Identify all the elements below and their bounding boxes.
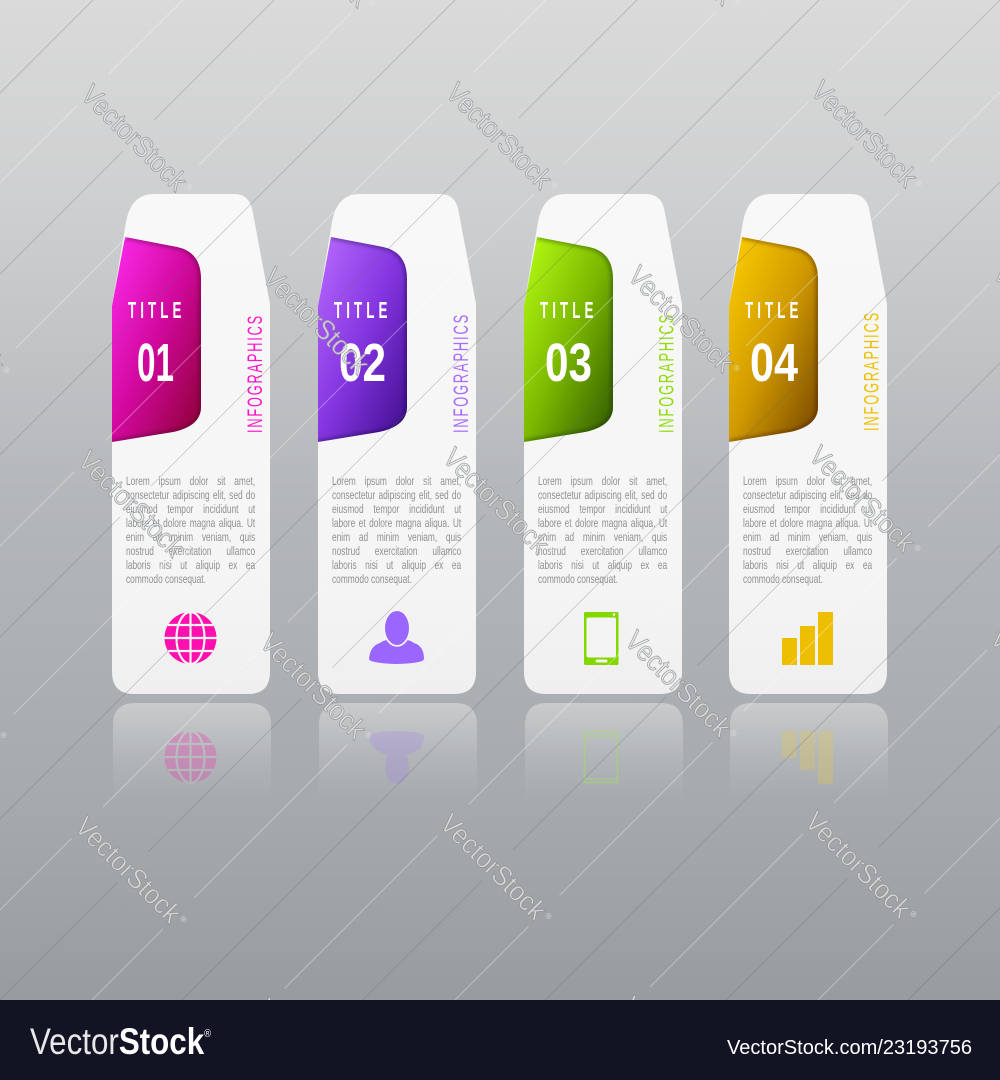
diagonal lines and watermarks overlay: VectorStock [803,440,922,558]
diagonal lines and watermarks overlay: ® [184,182,195,193]
card shape [318,194,476,694]
body text: Lorem ipsum dolor sit amet, [126,474,255,488]
vertical label: INFOGRAPHICS [860,311,884,431]
card shape [112,194,270,694]
diagonal lines and watermarks overlay: ® [1,365,12,376]
body text: laboris nisi ut aliquip ex ea [538,558,667,572]
body text: laboris nisi ut aliquip ex ea [332,558,461,572]
diagonal lines and watermarks overlay: VectorStock [434,808,553,926]
diagonal lines and watermarks overlay: VectorStock [619,625,738,743]
body text: labore et dolore magna aliqua. Ut [538,516,667,530]
reflection 4: bar chart [730,703,888,784]
body text: laboris nisi ut aliquip ex ea [743,558,872,572]
body text: Lorem ipsum dolor sit amet, [332,474,461,488]
coloured tab [524,237,612,442]
body text: nostrud exercitation ullamco [126,544,255,558]
diagonal lines and watermarks overlay: VectorStock [72,445,191,563]
diagonal lines and watermarks overlay: ® [543,911,554,922]
footer logo: ® [204,1028,211,1040]
body text: nostrud exercitation ullamco [332,544,461,558]
tab title: TITLE [540,297,597,323]
body text: commodo consequat. [126,572,206,586]
body text: eiusmod tempor incididunt ut [538,502,667,516]
body text: consectetur adipiscing elit, sed do [538,488,667,502]
body text: eiusmod tempor incididunt ut [332,502,461,516]
tab title: TITLE [128,297,186,323]
tab number: 04 [750,333,798,393]
body text: eiusmod tempor incididunt ut [126,502,255,516]
panel 1: pink card [112,194,270,694]
footer image id: VectorStock.com/23193756 [727,1037,972,1059]
coloured tab [112,237,201,442]
body text: enim ad minim veniam, quis [332,530,461,544]
body text: commodo consequat. [743,572,823,586]
diagonal lines and watermarks overlay: VectorStock [799,806,918,924]
diagonal lines and watermarks overlay: ® [549,180,560,191]
diagonal lines and watermarks overlay: ® [366,365,377,376]
reflection 2: person [319,703,477,784]
coloured tab [729,237,818,442]
diagonal lines and watermarks overlay: ® [728,728,739,739]
body text: enim ad minim veniam, quis [743,530,872,544]
tab number: 02 [339,333,386,393]
diagonal lines and watermarks overlay: ® [908,909,919,920]
diagonal lines and watermarks overlay: ® [546,545,557,556]
card shape [729,194,887,694]
diagonal lines and watermarks overlay: VectorStock [75,79,194,197]
vertical label: INFOGRAPHICS [655,313,678,433]
body text: commodo consequat. [538,572,617,586]
body text: nostrud exercitation ullamco [743,544,872,558]
body text: enim ad minim veniam, quis [538,530,667,544]
body text: consectetur adipiscing elit, sed do [743,488,872,502]
body text [743,474,872,586]
diagonal lines and watermarks overlay: VectorStock [622,260,741,378]
body text: eiusmod tempor incididunt ut [743,502,872,516]
body text [126,474,256,586]
diagonal lines and watermarks overlay: ® [363,730,374,741]
body text [332,474,462,586]
tab number: 03 [544,333,592,393]
vertical label: INFOGRAPHICS [450,313,473,433]
body text: commodo consequat. [332,572,412,586]
icon: globe [164,612,217,664]
diagonal lines and watermarks overlay: ® [912,543,923,554]
reflection 1: globe [113,703,271,784]
tab title: TITLE [334,297,392,323]
coloured tab [318,237,407,442]
panel 3: green card [524,194,682,694]
card shape [524,194,682,694]
reflection 3: tablet [525,703,683,784]
body text: consectetur adipiscing elit, sed do [126,488,255,502]
body text: enim ad minim veniam, quis [126,530,255,544]
body text [538,474,668,586]
diagonal lines and watermarks overlay: ® [731,363,742,374]
footer logo: VectorStock [30,1021,220,1062]
diagonal lines and watermarks overlay: VectorStock [254,627,373,745]
panel 4: gold card [729,194,887,694]
diagonal lines and watermarks overlay: VectorStock [257,262,376,380]
body text: nostrud exercitation ullamco [538,544,667,558]
icon: person [369,611,424,664]
diagonal lines and watermarks overlay: ® [914,178,925,189]
diagonal lines and watermarks overlay: ® [178,914,189,925]
tab title: TITLE [745,297,802,323]
body text: labore et dolore magna aliqua. Ut [126,516,255,530]
diagonal lines and watermarks overlay: VectorStock [805,75,924,193]
body text: laboris nisi ut aliquip ex ea [126,558,255,572]
tab number: 01 [137,333,174,393]
icon: bar chart [782,612,833,665]
body text: labore et dolore magna aliqua. Ut [332,516,461,530]
diagonal lines and watermarks overlay: VectorStock [69,811,188,929]
body text: Lorem ipsum dolor sit amet, [538,474,667,488]
footer bar [0,1000,1000,1080]
body text: labore et dolore magna aliqua. Ut [743,516,872,530]
body text: Lorem ipsum dolor sit amet, [743,474,872,488]
diagonal lines and watermarks overlay: ® [181,548,192,559]
vertical label: INFOGRAPHICS [244,314,267,433]
panel 2: purple card [318,194,476,694]
diagonal lines and watermarks overlay: VectorStock [437,442,556,560]
icon: tablet [584,612,618,665]
body text: consectetur adipiscing elit, sed do [332,488,461,502]
diagonal lines and watermarks overlay: VectorStock [440,77,559,195]
